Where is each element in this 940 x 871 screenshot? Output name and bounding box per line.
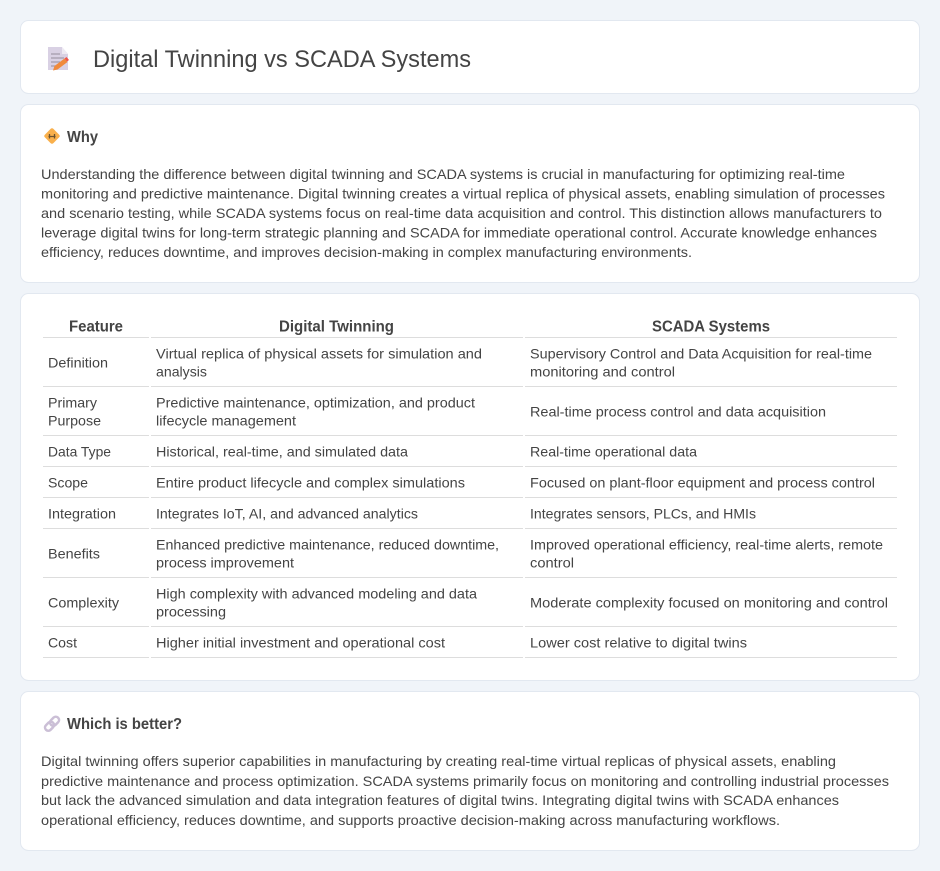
row: complexity: processing (156, 604, 226, 620)
row: primary purpose: Predictive maintenance, optimization, and product (156, 394, 475, 410)
table header row: Digital Twinning (279, 318, 394, 336)
text block: why: leverage digital twins for long-term strategic planning and SCADA for immediate operational control. Accurate knowledge enhances (41, 224, 877, 240)
row: benefits: control (530, 554, 574, 570)
row: scope (43, 474, 897, 498)
row: cost: Cost (48, 634, 77, 650)
row: benefits: Improved operational efficiency, real-time alerts, remote (530, 536, 883, 552)
row: definition: monitoring and control (530, 364, 675, 380)
icon: warning diamond (44, 128, 60, 144)
heading: why: Why (67, 129, 98, 146)
panel: header (20, 20, 920, 94)
text block: which is better: operational efficiency, reduces downtime, and supports proactive decision-making across manufacturing workflows. (41, 812, 780, 828)
row: benefits: Benefits (48, 546, 100, 562)
text block: why (41, 166, 885, 260)
row: definition: Definition (48, 354, 108, 370)
row: definition: Virtual replica of physical assets for simulation and (156, 346, 482, 362)
text block: which is better: Digital twinning offers superior capabilities in manufacturing by creating real-time virtual replicas of physical assets, enabling (41, 753, 836, 769)
row: complexity: Complexity (48, 594, 119, 610)
table header row: Feature (69, 318, 123, 336)
row: data type (43, 444, 897, 466)
row: primary purpose: Purpose (48, 412, 101, 428)
row: scope: Entire product lifecycle and complex simulations (156, 474, 465, 490)
panel: why (20, 104, 920, 282)
row: complexity (43, 586, 897, 626)
row: cost: Higher initial investment and operational cost (156, 634, 445, 650)
row: integration (43, 506, 897, 528)
row: integration: Integrates IoT, AI, and advanced analytics (156, 506, 418, 522)
row: primary purpose: lifecycle management (156, 412, 296, 428)
text block: why: and scenario testing, while SCADA systems focus on real-time data acquisition and control. This distinction allows manufacturers to (41, 205, 882, 221)
row: scope: Scope (48, 474, 88, 490)
row: data type: Data Type (48, 444, 111, 460)
text block: why: monitoring and predictive maintenance. Digital twinning creates a virtual replica of physical assets, enabling simulation of processes (41, 186, 885, 202)
row: complexity: Moderate complexity focused on monitoring and control (530, 594, 888, 610)
row: definition: Supervisory Control and Data Acquisition for real-time (530, 346, 872, 362)
row: benefits: Enhanced predictive maintenance, reduced downtime, (156, 536, 499, 552)
row: cost (43, 634, 897, 658)
row: definition (43, 346, 897, 386)
row: primary purpose (43, 394, 897, 436)
text block: why: Understanding the difference between digital twinning and SCADA systems is crucial in manufacturing for optimizing real-time (41, 166, 845, 182)
panel: which is better (20, 692, 920, 850)
panel: comparison table (20, 294, 920, 680)
row: primary purpose: Real-time process control and data acquisition (530, 404, 826, 420)
row: scope: Focused on plant-floor equipment and process control (530, 474, 875, 490)
icon: link (44, 715, 60, 732)
row: cost: Lower cost relative to digital twins (530, 634, 747, 650)
row: integration: Integrates sensors, PLCs, and HMIs (530, 506, 756, 522)
row: primary purpose: Primary (48, 394, 97, 410)
row: data type: Historical, real-time, and simulated data (156, 444, 408, 460)
row: data type: Real-time operational data (530, 444, 697, 460)
title: Digital Twinning vs SCADA Systems (93, 46, 471, 73)
text block: which is better (41, 753, 889, 828)
row: integration: Integration (48, 506, 116, 522)
text block: which is better: predictive maintenance and process optimization. SCADA systems primarily focus on monitoring and controlling industrial processes (41, 773, 889, 789)
table header row: SCADA Systems (652, 318, 770, 336)
text block: which is better: but lack the advanced simulation and data integration features of digital twins. Integrating digital twins with SCADA enhances (41, 792, 839, 808)
row: benefits (43, 536, 897, 578)
icon: document with pencil (48, 47, 69, 70)
table header row (43, 318, 897, 338)
heading: which is better: Which is better? (67, 716, 182, 733)
row: complexity: High complexity with advanced modeling and data (156, 586, 477, 602)
text block: why: efficiency, reduces downtime, and improves decision-making in complex manufacturing environments. (41, 244, 692, 260)
row: benefits: process improvement (156, 554, 294, 570)
row: definition: analysis (156, 364, 207, 380)
